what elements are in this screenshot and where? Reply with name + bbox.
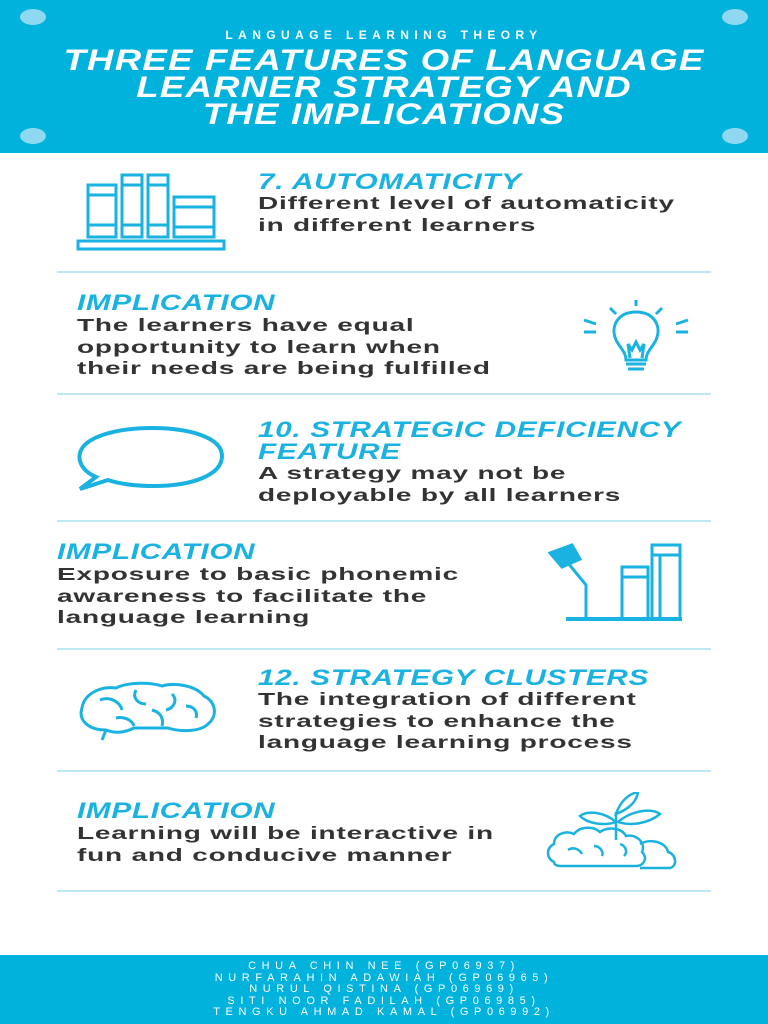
- heading: automaticity: 7. AUTOMATICITY: [258, 169, 522, 194]
- text: automaticity: Different level of automaticity: [258, 193, 675, 213]
- heading: strategic deficiency: FEATURE: [258, 439, 401, 464]
- title: THREE FEATURES OF LANGUAGE: [63, 44, 705, 77]
- title: LEARNER STRATEGY AND: [136, 71, 632, 104]
- footer: authors: NURUL QISTINA (GP06969): [249, 983, 519, 995]
- text: implication 1: [77, 315, 491, 378]
- text: strategy clusters: strategies to enhance the: [258, 710, 616, 730]
- title: [63, 44, 705, 131]
- text: automaticity: in different learners: [258, 214, 536, 234]
- heading: strategic deficiency: [258, 417, 683, 464]
- footer: authors: SITI NOOR FADILAH (GP06985): [227, 994, 541, 1006]
- text: implication 3: [77, 823, 494, 864]
- text: implication 1: their needs are being fulfilled: [77, 358, 491, 378]
- title: THE IMPLICATIONS: [203, 98, 565, 131]
- icon: brain with plant: [546, 792, 676, 870]
- text: strategic deficiency: A strategy may not be: [258, 463, 566, 483]
- text: strategic deficiency: deployable by all learners: [258, 484, 621, 504]
- text: strategy clusters: language learning process: [258, 732, 633, 752]
- text: implication 2: [57, 564, 459, 627]
- icon: light bulb: [584, 300, 688, 370]
- text: strategic deficiency: [258, 463, 621, 504]
- subtitle: LANGUAGE LEARNING THEORY: [225, 28, 543, 42]
- heading: implication 3: IMPLICATION: [77, 798, 275, 823]
- text: implication 1: opportunity to learn when: [77, 336, 441, 356]
- footer: authors: [0, 955, 768, 1024]
- text: implication 1: The learners have equal: [77, 315, 414, 335]
- icon: lamp and books: [548, 543, 682, 621]
- heading: strategy clusters: 12. STRATEGY CLUSTERS: [258, 665, 649, 690]
- text: implication 2: awareness to facilitate the: [57, 586, 427, 606]
- text: implication 2: Exposure to basic phonemic: [57, 564, 459, 584]
- text: strategy clusters: The integration of different: [258, 689, 637, 709]
- header banner: [0, 0, 768, 153]
- icon: books: [76, 174, 226, 250]
- text: automaticity: [258, 193, 675, 234]
- heading: implication 1: IMPLICATION: [77, 290, 275, 315]
- text: implication 3: fun and conducive manner: [77, 844, 452, 864]
- footer: authors: CHUA CHIN NEE (GP06937): [248, 960, 520, 972]
- icon: speech bubble: [78, 426, 224, 491]
- text: strategy clusters: [258, 689, 637, 752]
- footer: authors: TENGKU AHMAD KAMAL (GP06992): [213, 1006, 555, 1018]
- text: implication 2: language learning: [57, 607, 310, 627]
- footer: authors: NURFARAHIN ADAWIAH (GP06965): [215, 972, 553, 984]
- text: implication 3: Learning will be interactive in: [77, 823, 494, 843]
- icon: brain: [80, 682, 216, 740]
- heading: implication 2: IMPLICATION: [57, 539, 255, 564]
- heading: strategic deficiency: 10. STRATEGIC DEFICIENCY: [258, 417, 681, 442]
